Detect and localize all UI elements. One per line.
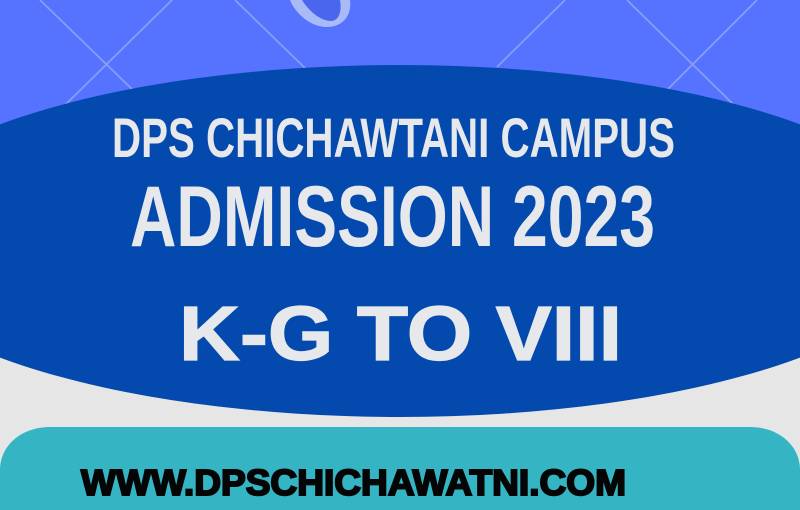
panel: dark blue ellipse [0, 65, 800, 417]
website url: WWW.DPSCHICHAWATNI.COM [81, 462, 626, 503]
subtitle: class range: K-G TO VIII [179, 291, 622, 377]
panel: blue header [0, 0, 800, 240]
panel: teal footer [0, 427, 800, 510]
icon: paperclip ring [290, 0, 350, 27]
